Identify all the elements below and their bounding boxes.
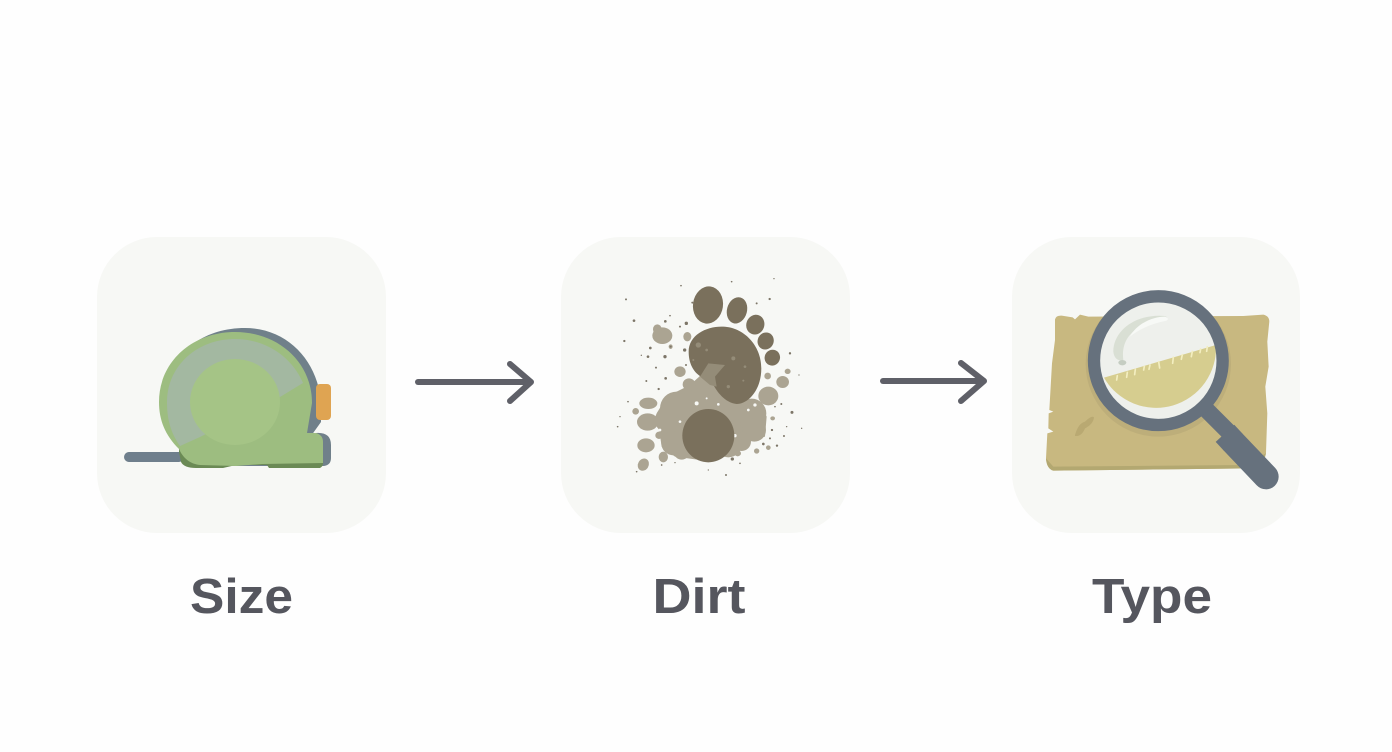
arrow: dirt to type [883, 363, 984, 401]
panel: size card [97, 237, 386, 533]
magnifier ring [1094, 296, 1223, 425]
label: size: Size [190, 570, 293, 624]
carpet stain [1075, 417, 1094, 436]
panel: type card [1012, 237, 1300, 533]
lens interior [1098, 301, 1218, 421]
ruler ticks [1117, 347, 1207, 380]
lens glare [1113, 316, 1167, 360]
speckles [617, 278, 802, 476]
magnifier handle [1205, 408, 1230, 433]
splatter: light dirt [632, 324, 791, 473]
sole worn patch [700, 363, 725, 387]
label: type: Type [1092, 570, 1212, 624]
arrow: size to dirt [418, 364, 531, 401]
label: dirt: Dirt [652, 570, 746, 624]
panel: dirt card [561, 237, 850, 533]
splatter holes [659, 397, 757, 437]
carpet sample [1046, 315, 1269, 471]
icon: dirty footprint [617, 278, 802, 476]
icon: tape measure [124, 328, 331, 468]
carpet seen through lens [1104, 345, 1216, 408]
footprint: dark sole and toes [682, 284, 783, 462]
sole flecks [692, 342, 746, 388]
lens shadow [1086, 291, 1231, 437]
icon: magnifier over carpet sample [1046, 291, 1269, 477]
